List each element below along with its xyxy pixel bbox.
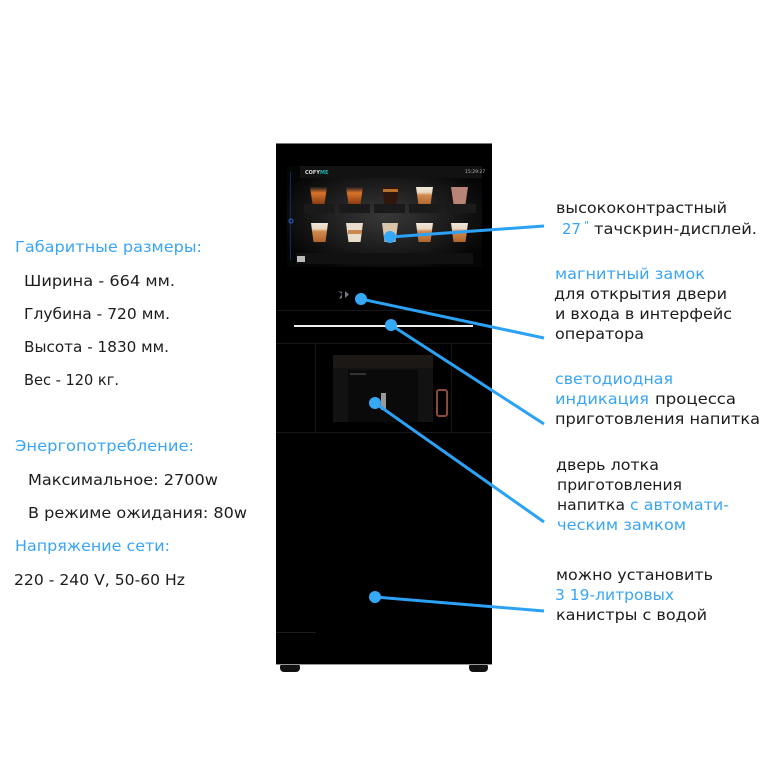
label: tray door: дверь лотка <box>556 456 659 474</box>
callout line: tray door <box>369 397 544 522</box>
label: water canisters <box>555 566 713 624</box>
drink cups, bottom row <box>311 223 468 242</box>
label: display: высококонтрастный <box>556 199 727 217</box>
label: display <box>556 199 757 238</box>
label: tray door: с автомати- <box>630 496 729 514</box>
label: water canisters: канистры с водой <box>556 606 707 624</box>
text block: power consumption <box>15 437 247 522</box>
label: tray door: ческим замком <box>557 516 686 534</box>
label: magnetic lock: и входа в интерфейс <box>555 305 732 323</box>
text block: mains voltage <box>14 537 185 589</box>
label: LED indication: светодиодная <box>555 370 673 388</box>
label: tray door <box>556 456 729 534</box>
machine feet <box>280 663 488 672</box>
beverage recess <box>333 355 433 422</box>
screen logo: COFYME <box>305 170 329 176</box>
text block: dimensions: Глубина - 720 мм. <box>24 305 170 323</box>
callout line: display <box>384 226 544 243</box>
text block: dimensions: Ширина - 664 мм. <box>24 272 175 290</box>
label: LED indication: приготовления напитка <box>555 410 760 428</box>
text block: dimensions: Высота - 1830 мм. <box>24 338 169 356</box>
label: display: тачскрин-дисплей. <box>594 220 757 238</box>
text block: power consumption: Максимальное: 2700w <box>28 471 218 489</box>
label: magnetic lock: для открытия двери <box>554 285 727 303</box>
label: magnetic lock <box>554 265 732 343</box>
label: tray door: приготовления <box>557 476 682 494</box>
text block: dimensions: Вес - 120 кг. <box>24 371 119 389</box>
screen clock: 15:29:27 <box>465 169 485 175</box>
LED indicator strip <box>294 325 473 327</box>
machine body <box>276 143 492 665</box>
drink cups, top row <box>304 187 476 213</box>
label: tray door: напитка <box>557 496 625 514</box>
callout line: LED indication <box>385 319 544 424</box>
label: magnetic lock: магнитный замок <box>555 265 705 283</box>
label: LED indication <box>555 370 760 428</box>
text block: mains voltage: Напряжение сети: <box>15 537 170 555</box>
label: water canisters: 3 19-литровых <box>555 586 674 604</box>
machine <box>276 143 492 672</box>
label: LED indication: индикация <box>555 390 649 408</box>
label: magnetic lock: оператора <box>555 325 644 343</box>
icon: contactless sensor <box>338 291 349 299</box>
text block: mains voltage: 220 - 240 V, 50-60 Hz <box>14 571 185 589</box>
text block: dimensions <box>15 238 202 389</box>
label: LED indication: процесса <box>655 390 736 408</box>
callout line: water canisters <box>369 591 544 611</box>
label: display: 27 <box>562 220 581 238</box>
touchscreen display <box>287 166 485 267</box>
panel dividers <box>276 310 492 433</box>
text block: dimensions: Габаритные размеры: <box>15 238 202 256</box>
label: display: " <box>584 219 589 232</box>
copper door handle <box>437 390 447 416</box>
text block: power consumption: В режиме ожидания: 80w <box>28 504 247 522</box>
callout line: magnetic lock <box>355 293 544 338</box>
label: water canisters: можно установить <box>556 566 713 584</box>
text block: power consumption: Энергопотребление: <box>15 437 194 455</box>
